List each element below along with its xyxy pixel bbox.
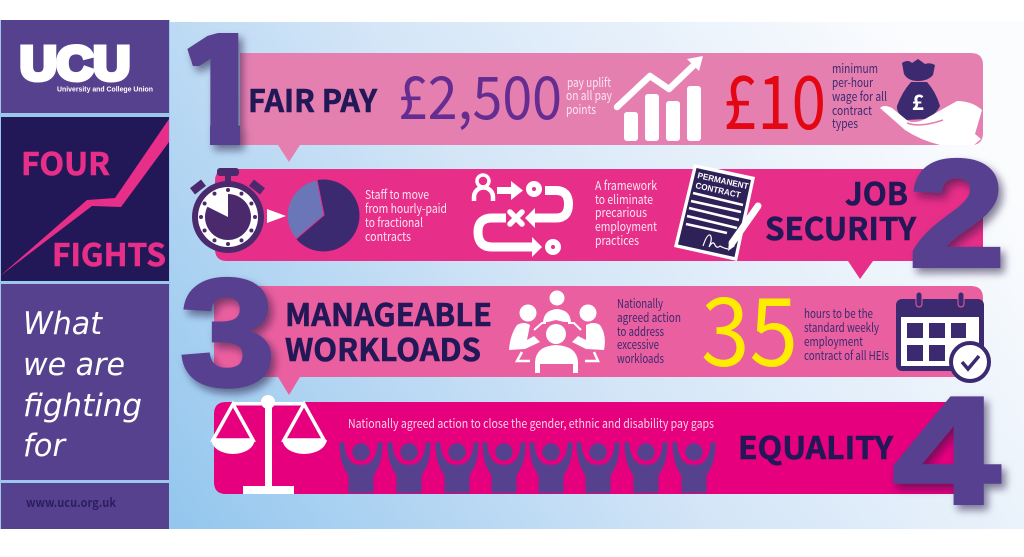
text: minimum wage: types bbox=[832, 114, 858, 132]
panel: fair pay bbox=[240, 44, 983, 162]
heading: job security: JOB bbox=[845, 169, 908, 214]
text: fractional contracts bbox=[365, 185, 447, 245]
icon: permanent contract bbox=[674, 164, 758, 261]
panel: what we are fighting for: we are bbox=[23, 347, 125, 383]
digit 1: 1 bbox=[176, 0, 265, 179]
text: nationally agreed action bbox=[617, 294, 681, 367]
heading: manageable workloads: WORKLOADS bbox=[285, 325, 481, 370]
panel: UCU logo: UCU bbox=[20, 36, 130, 90]
panel: manageable workloads bbox=[214, 257, 989, 395]
text: fractional contracts: to fractional bbox=[365, 213, 423, 231]
text: minimum wage: contract bbox=[832, 101, 872, 119]
heading: equality: EQUALITY bbox=[738, 423, 894, 468]
panel: what we are fighting for: fighting bbox=[23, 388, 142, 424]
text: nationally agreed action: to address bbox=[617, 322, 664, 340]
text: 35 hours: contract of all HEIs bbox=[804, 346, 889, 364]
icon: rising bar chart bbox=[617, 56, 703, 141]
text: minimum wage: wage for all bbox=[832, 87, 887, 105]
icon: calendar bbox=[896, 292, 989, 381]
panel: what we are fighting for bbox=[1, 284, 169, 480]
arrow: stopwatch to pie bbox=[267, 209, 286, 223]
text: pay uplift: points bbox=[566, 100, 596, 118]
text: minimum wage: per-hour bbox=[832, 73, 873, 91]
text: 35 hours: hours to be the bbox=[804, 304, 873, 322]
text: pay uplift: pay uplift bbox=[567, 73, 611, 91]
heading: manageable workloads bbox=[285, 290, 492, 370]
text: fractional contracts: Staff to move bbox=[365, 185, 429, 203]
background panel bbox=[170, 22, 1024, 529]
panel: UCU logo bbox=[1, 20, 169, 113]
sidebar bbox=[0, 20, 170, 529]
icon: row of people bbox=[340, 442, 716, 493]
text: framework: A framework bbox=[595, 176, 657, 194]
text: framework bbox=[595, 176, 657, 249]
text: nationally agreed action: Nationally bbox=[617, 294, 663, 312]
figure: 10 pounds: £10 bbox=[723, 44, 826, 151]
panel: website: www.ucu.org.uk bbox=[26, 492, 116, 511]
icon: money bag in hand: £ bbox=[912, 87, 924, 117]
text: fractional contracts: contracts bbox=[365, 227, 411, 245]
icon: meeting bbox=[509, 290, 605, 373]
text: fractional contracts: from hourly-paid bbox=[365, 199, 447, 217]
text: pay uplift: on all pay bbox=[566, 86, 612, 104]
panel: what we are fighting for: What bbox=[23, 306, 104, 342]
digit 3: 3 bbox=[180, 248, 275, 418]
heading: manageable workloads: MANAGEABLE bbox=[285, 290, 492, 335]
icon: money bag in hand bbox=[880, 59, 982, 145]
icon: permanent contract: CONTRACT bbox=[695, 180, 742, 200]
icon: stopwatch bbox=[190, 168, 265, 253]
panel: four fights: FOUR bbox=[21, 139, 110, 184]
text: pay gaps: Nationally agreed action to close the gender, ethnic and disability pay gaps bbox=[348, 414, 714, 432]
panel: four fights bbox=[0, 117, 169, 281]
panel: four fights: FIGHTS bbox=[52, 230, 166, 275]
text: framework: precarious bbox=[595, 203, 647, 221]
icon: scales bbox=[211, 395, 327, 494]
figure: 35: 35 bbox=[701, 257, 798, 394]
icon: flow framework bbox=[474, 175, 568, 257]
text: 35 hours bbox=[804, 304, 889, 364]
panel: what we are fighting for: for bbox=[23, 428, 67, 464]
figure: 2,500: £2,500 bbox=[398, 51, 562, 136]
panel: website bbox=[1, 483, 169, 529]
text: pay uplift bbox=[566, 73, 612, 118]
text: minimum wage: minimum bbox=[832, 59, 878, 77]
text: 35 hours: standard weekly bbox=[804, 318, 879, 336]
chart: pie bbox=[287, 180, 360, 252]
text: framework: employment bbox=[595, 217, 657, 235]
heading: job security: SECURITY bbox=[765, 204, 917, 249]
text: nationally agreed action: excessive bbox=[617, 335, 659, 353]
icon: permanent contract: PERMANENT bbox=[697, 170, 750, 191]
panel: UCU logo: University and College Union bbox=[57, 84, 153, 94]
heading: fair pay: FAIR PAY bbox=[248, 76, 378, 121]
digit 4: 4 bbox=[893, 366, 1000, 536]
heading: job security bbox=[765, 169, 917, 249]
panel: job security bbox=[190, 164, 983, 279]
text: nationally agreed action: workloads bbox=[617, 349, 664, 367]
text: 35 hours: employment bbox=[804, 332, 863, 350]
text: nationally agreed action: agreed action bbox=[617, 308, 681, 326]
text: framework: practices bbox=[595, 231, 639, 249]
digit 2: 2 bbox=[909, 129, 1005, 299]
text: minimum wage bbox=[832, 59, 887, 132]
text: framework: to eliminate bbox=[595, 190, 653, 208]
panel: equality bbox=[211, 395, 955, 494]
